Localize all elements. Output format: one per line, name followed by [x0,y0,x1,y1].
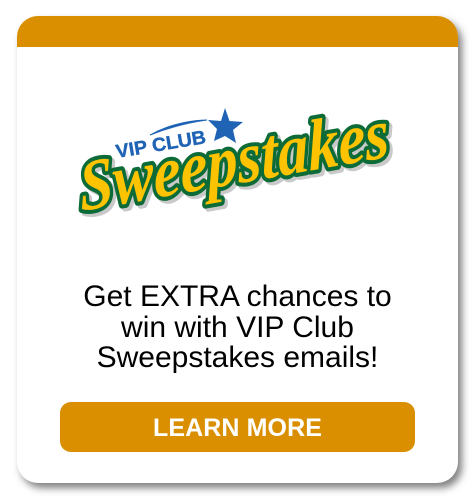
header bar [17,16,458,47]
button: learn more: LEARN MORE [153,414,322,442]
icon: star [208,108,243,143]
logo: Sweepstakes lettering: Sweepstakes [77,92,391,227]
logo: VIP Club wordmark: VIP CLUB [114,127,208,163]
text block: description: win with VIP Club [121,310,354,344]
logo: Sweepstakes shadow: Sweepstakes [80,95,394,230]
logo: blue swoosh [150,120,207,135]
text block: description: Sweepstakes emails! [97,341,378,374]
text block: description: Get EXTRA chances to [83,280,392,313]
text block: description [83,280,392,374]
button: learn more [60,402,415,452]
